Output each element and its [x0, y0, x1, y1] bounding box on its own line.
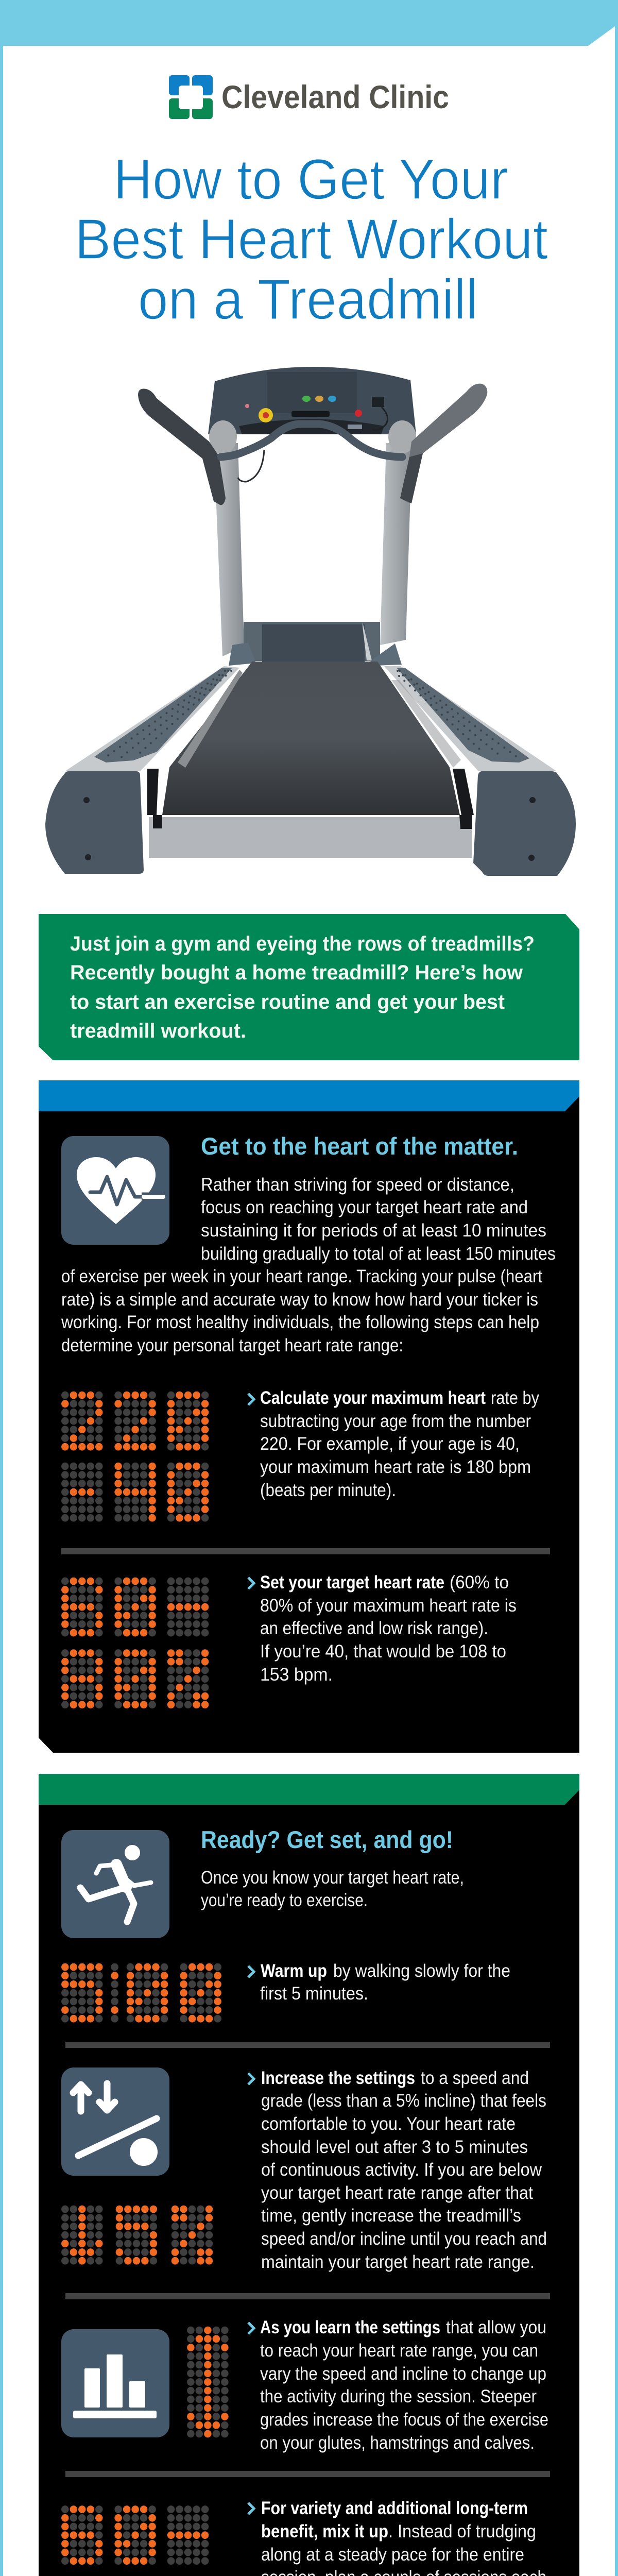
arrow: chevron — [248, 1578, 254, 1589]
title: How to Get Your — [113, 148, 508, 211]
text: increase the settings: time, gently increase the treadmill’s — [261, 2206, 521, 2226]
text: increase the settings: your target heart rate range after that — [261, 2183, 533, 2203]
dot matrix display: 220 — [61, 1391, 209, 1451]
title: on a Treadmill — [138, 268, 478, 331]
text: calculate maximum heart rate: rate by — [491, 1388, 539, 1408]
text: warm up: Warm up — [261, 1961, 327, 1981]
dot matrix display: minus 40 — [61, 1462, 209, 1522]
text: increase the settings: Increase the settings — [261, 2068, 415, 2088]
treadmill posts — [214, 443, 412, 656]
text: set target heart rate: (60% to — [450, 1572, 509, 1592]
text: as you learn the settings: vary the speed and incline to change up — [260, 2364, 546, 2384]
arrow: chevron — [248, 2073, 254, 2084]
logo: Cleveland Clinic — [169, 75, 449, 119]
text: intro paragraph — [61, 1175, 556, 1355]
text: set target heart rate — [260, 1572, 517, 1685]
dot matrix display: 5:00 — [61, 1963, 222, 2023]
text: as you learn the settings: grades increase the focus of the exercise — [260, 2410, 548, 2430]
dot matrix display: 60 dash — [61, 2505, 209, 2565]
panel: intro callout — [39, 914, 579, 1060]
dot matrix display: up and down arrow — [186, 2326, 229, 2438]
text: intro paragraph: Rather than striving for speed or distance, — [201, 1175, 514, 1195]
treadmill back panel — [229, 622, 402, 666]
arrow: chevron — [248, 2323, 254, 2334]
text: increase the settings: should level out after 3 to 5 minutes — [261, 2137, 528, 2157]
text: increase the settings — [261, 2068, 547, 2272]
text: intro paragraph: rate) is a simple and accurate way to know how hard your ticker is — [61, 1290, 538, 1310]
text: calculate maximum heart rate: Calculate your maximum heart — [260, 1388, 486, 1408]
dot matrix display: 60 dash — [61, 1577, 209, 1637]
text: intro paragraph: sustaining it for periods of at least 10 minutes — [201, 1221, 546, 1241]
text: increase the settings: speed and/or incline until you reach and — [261, 2229, 547, 2249]
text: calculate maximum heart rate: subtracting your age from the number — [260, 1411, 531, 1431]
title: Best Heart Workout — [75, 208, 548, 271]
panel: get to the heart of the matter — [39, 1080, 579, 1753]
text: as you learn the settings: As you learn the settings — [260, 2317, 440, 2337]
text: increase the settings: to a speed and — [421, 2068, 529, 2088]
text: as you learn the settings — [260, 2317, 548, 2453]
text: for variety mix it up: For variety and additional long-term — [261, 2498, 528, 2518]
text: calculate maximum heart rate: 220. For example, if your age is 40, — [260, 1434, 520, 1454]
text: intro: Once you know your target heart rate, — [201, 1868, 464, 1888]
text: as you learn the settings: to reach your heart rate range, you can — [260, 2341, 538, 2361]
text: calculate maximum heart rate: (beats per minute). — [260, 1480, 396, 1500]
treadmill console — [208, 367, 416, 482]
icon: heart with pulse line — [61, 1136, 169, 1245]
icon: speed and incline arrows — [61, 2067, 169, 2176]
text: intro paragraph: building gradually to total of at least 150 minutes — [201, 1244, 556, 1264]
text: intro — [201, 1868, 464, 1910]
text: set target heart rate: Set your target heart rate — [260, 1572, 444, 1592]
text: increase the settings: of continuous activity. If you are below — [261, 2160, 542, 2180]
panel: ready get set and go — [39, 1774, 579, 2576]
dot matrix display: down arrow 5 percent — [61, 2205, 213, 2265]
text: warm up: by walking slowly for the — [333, 1961, 510, 1981]
text: warm up: first 5 minutes. — [260, 1984, 368, 2004]
heading: Ready? Get set, and go! — [201, 1826, 453, 1853]
panel: intro callout: to start an exercise routine and get your best — [70, 991, 505, 1013]
panel: intro callout: treadmill workout. — [70, 1020, 246, 1042]
treadmill front panel and roller brackets — [147, 769, 474, 858]
text: for variety mix it up — [261, 2498, 546, 2576]
text: calculate maximum heart rate: your maximum heart rate is 180 bpm — [260, 1457, 531, 1477]
text: warm up — [260, 1961, 510, 2004]
logo: Cleveland Clinic: Cleveland Clinic — [221, 79, 449, 115]
treadmill side rails and foot pads — [65, 666, 557, 771]
panel: intro callout: Recently bought a home treadmill? Here’s how — [70, 961, 523, 984]
text: intro: you’re ready to exercise. — [201, 1890, 368, 1910]
text: increase the settings: maintain your target heart rate range. — [261, 2252, 535, 2272]
treadmill front end caps — [45, 771, 576, 876]
icon: runner — [61, 1830, 169, 1938]
text: as you learn the settings: that allow you — [446, 2317, 546, 2337]
dot matrix display: 80 percent — [61, 1649, 209, 1709]
text: set target heart rate: 80% of your maximum heart rate is — [260, 1596, 517, 1616]
treadmill post caps — [209, 420, 416, 453]
arrow: chevron — [248, 2503, 254, 2514]
text: set target heart rate: 153 bpm. — [260, 1665, 333, 1685]
arrow: chevron — [248, 1966, 254, 1977]
heading: Get to the heart of the matter. — [201, 1132, 518, 1160]
text: for variety mix it up: benefit, mix it up — [261, 2521, 388, 2541]
text: set target heart rate: If you’re 40, that would be 108 to — [260, 1641, 506, 1662]
text: increase the settings: grade (less than a 5% incline) that feels — [261, 2091, 546, 2111]
title — [75, 148, 548, 331]
text: calculate maximum heart rate — [260, 1388, 539, 1500]
text: as you learn the settings: on your glutes, hamstrings and calves. — [260, 2433, 535, 2453]
text: intro paragraph: focus on reaching your target heart rate and — [201, 1197, 528, 1217]
panel: intro callout: Just join a gym and eyeing the rows of treadmills? — [70, 933, 535, 955]
text: intro paragraph: working. For most healthy individuals, the following steps can help — [61, 1312, 539, 1332]
icon: bar chart — [61, 2329, 169, 2437]
treadmill belt — [162, 662, 461, 815]
text: for variety mix it up: . Instead of trudging — [388, 2521, 536, 2541]
text: intro paragraph: of exercise per week in your heart range. Tracking your pulse (heart — [61, 1266, 542, 1286]
text: for variety mix it up: along at a steady pace for the entire — [261, 2545, 524, 2565]
illustration: treadmill — [45, 367, 576, 876]
text: intro paragraph: determine your personal target heart rate range: — [61, 1335, 403, 1355]
text: set target heart rate: an effective and low risk range). — [260, 1618, 488, 1638]
arrow: chevron — [248, 1394, 254, 1405]
treadmill handles — [138, 384, 487, 505]
text: as you learn the settings: the activity during the session. Steeper — [260, 2386, 537, 2406]
text: increase the settings: comfortable to you. Your heart rate — [261, 2114, 516, 2134]
